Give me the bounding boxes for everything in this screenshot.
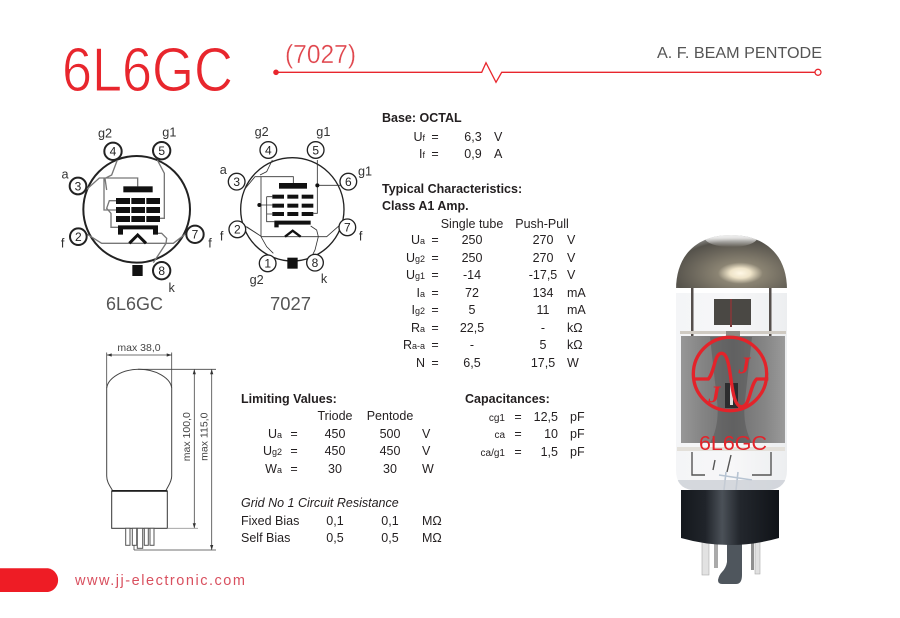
grid circuit resistance table: MΩ (422, 514, 442, 528)
grid circuit resistance table: Grid No 1 Circuit Resistance (241, 496, 399, 510)
typical characteristics table: Typical Characteristics: (382, 182, 522, 196)
grid circuit resistance table: 0,5 (326, 531, 344, 545)
tube category label: A. F. BEAM PENTODE (657, 45, 822, 62)
red JJ logo: J (707, 382, 721, 408)
typical characteristics table: 134 (533, 286, 553, 300)
header waveform line (273, 63, 821, 82)
limiting values table: Ua (268, 427, 282, 441)
limiting values table: 450 (325, 427, 345, 441)
limiting values table: Pentode (367, 409, 413, 423)
typical characteristics table: W (567, 356, 579, 370)
pinout diagram: 6L6GC: 3 (75, 179, 82, 193)
limiting values table: V (422, 444, 431, 458)
pinout diagram: 7027: 1 (264, 257, 271, 271)
typical characteristics table: - (470, 338, 474, 352)
pinout diagram: 6L6GC: f (208, 236, 212, 250)
typical characteristics table: = (431, 286, 439, 300)
capacitances table (465, 392, 585, 459)
typical characteristics table: -14 (463, 268, 481, 282)
typical characteristics table: 5 (469, 303, 476, 317)
base and heater values: = (431, 130, 439, 144)
typical characteristics table: 250 (462, 251, 482, 265)
typical characteristics table: 17,5 (531, 356, 555, 370)
footer red tab (0, 568, 58, 592)
pinout diagram: 7027 (220, 125, 372, 287)
grid circuit resistance table: 0,1 (326, 514, 344, 528)
capacitances table: = (514, 445, 522, 459)
typical characteristics table: 72 (465, 286, 479, 300)
base and heater values: If (419, 147, 425, 161)
limiting values table: Limiting Values: (241, 392, 337, 406)
limiting values table: = (290, 427, 298, 441)
tube pins (702, 540, 760, 584)
pinout diagram: 6L6GC: g2 (98, 126, 112, 140)
red JJ logo: J (737, 353, 751, 379)
capacitances table: 10 (544, 427, 558, 441)
typical characteristics table: 11 (537, 303, 550, 317)
red type marking on glass: 6L6GC (699, 433, 767, 455)
capacitances table: pF (570, 410, 585, 424)
typical characteristics table: Ia (416, 286, 425, 300)
limiting values table: = (290, 462, 298, 476)
capacitances table: cg1 (489, 413, 505, 424)
typical characteristics table: mA (567, 303, 586, 317)
pinout diagram: 7027: 5 (312, 143, 319, 157)
typical characteristics table: -17,5 (529, 268, 557, 282)
pinout diagram: 7027: 3 (233, 175, 240, 189)
glass bulb (676, 235, 787, 490)
capacitances table: ca (494, 430, 505, 441)
capacitances table: pF (570, 427, 585, 441)
pinout diagram: 7027: g1 (358, 165, 372, 179)
base and heater values: A (494, 147, 503, 161)
pinout diagram: 6L6GC: k (169, 281, 176, 295)
base and heater values (382, 111, 503, 161)
pinout diagram: 6L6GC (61, 126, 212, 295)
typical characteristics table: 270 (533, 251, 553, 265)
typical characteristics table: = (431, 303, 439, 317)
typical characteristics table: V (567, 268, 576, 282)
dimension drawing: max 38,0 (117, 342, 161, 354)
base and heater values: 6,3 (464, 130, 482, 144)
limiting values table: V (422, 427, 431, 441)
base and heater values: 0,9 (464, 147, 482, 161)
typical characteristics table: 22,5 (460, 321, 484, 335)
typical characteristics table: 5 (540, 338, 547, 352)
limiting values table: 450 (380, 444, 400, 458)
website url: www.jj-electronic.com (74, 573, 245, 589)
title: 6L6GC (62, 36, 233, 105)
vacuum tube photo illustration (676, 235, 787, 584)
typical characteristics table: 6,5 (463, 356, 481, 370)
typical characteristics table: Class A1 Amp. (382, 199, 469, 213)
pinout diagram: 7027: f (359, 230, 363, 244)
capacitances table: = (514, 427, 522, 441)
capacitances table: 1,5 (541, 445, 558, 459)
typical characteristics table: mA (567, 286, 586, 300)
capacitances table: ca/g1 (481, 448, 505, 459)
limiting values table: Wa (265, 462, 282, 476)
pinout diagram: 7027: 8 (312, 256, 319, 270)
limiting values table: 450 (325, 444, 345, 458)
red JJ logo (693, 337, 768, 411)
typical characteristics table: 250 (462, 233, 482, 247)
base and heater values: Uf (413, 130, 425, 144)
black base (681, 490, 779, 545)
pinout diagram: 7027: a (220, 163, 228, 177)
typical characteristics table: Ra-a (403, 338, 425, 352)
typical characteristics table: V (567, 251, 576, 265)
subtitle: alternate type: (7027) (285, 39, 356, 69)
pinout diagram: 7027: 2 (234, 223, 241, 237)
base and heater values: Base: OCTAL (382, 111, 462, 125)
typical characteristics table (382, 182, 586, 370)
capacitances table: 12,5 (534, 410, 558, 424)
typical characteristics table: Push-Pull (515, 217, 569, 231)
pinout diagram: 6L6GC: 2 (75, 230, 82, 244)
typical characteristics table: kΩ (567, 338, 583, 352)
diagram caption: 7027: 7027 (270, 293, 311, 314)
base and heater values: V (494, 130, 503, 144)
capacitances table: pF (570, 445, 585, 459)
typical characteristics table: Single tube (441, 217, 503, 231)
limiting values table: W (422, 462, 434, 476)
typical characteristics table: Ra (411, 321, 425, 335)
pinout diagram: 6L6GC: g1 (162, 126, 176, 140)
pinout diagram: 6L6GC: 4 (110, 145, 117, 159)
grid circuit resistance table: 0,1 (381, 514, 399, 528)
typical characteristics table: Ig2 (412, 303, 425, 317)
pinout diagram: 6L6GC: 8 (158, 264, 165, 278)
typical characteristics table: kΩ (567, 321, 583, 335)
dimension drawing: max 115,0 (199, 412, 211, 461)
typical characteristics table: = (431, 268, 439, 282)
pinout diagram: 6L6GC: a (61, 167, 69, 181)
typical characteristics table: N (416, 356, 425, 370)
pinout diagram: 7027: 4 (265, 143, 272, 157)
typical characteristics table: = (431, 233, 439, 247)
pinout diagram: 7027: g2 (255, 125, 269, 139)
diagram caption: 6L6GC: 6L6GC (106, 293, 163, 314)
grid circuit resistance table: MΩ (422, 531, 442, 545)
typical characteristics table: 270 (533, 233, 553, 247)
typical characteristics table: = (431, 356, 439, 370)
pinout diagram: 6L6GC: 5 (158, 144, 165, 158)
limiting values table: 500 (380, 427, 400, 441)
pinout diagram: 7027: g1 (316, 125, 330, 139)
base and heater values: = (431, 147, 439, 161)
typical characteristics table: = (431, 251, 439, 265)
typical characteristics table: = (431, 321, 439, 335)
grid circuit resistance table: Self Bias (241, 531, 290, 545)
typical characteristics table: V (567, 233, 576, 247)
limiting values table: = (290, 444, 298, 458)
limiting values table: 30 (328, 462, 342, 476)
limiting values table: Triode (318, 409, 353, 423)
pinout diagram: 6L6GC: f (61, 236, 65, 250)
typical characteristics table: Ug1 (406, 268, 425, 282)
pinout diagram: 6L6GC: 7 (192, 228, 199, 242)
pinout diagram: 7027: k (321, 272, 328, 286)
typical characteristics table: Ug2 (406, 251, 425, 265)
typical characteristics table: = (431, 338, 439, 352)
capacitances table: Capacitances: (465, 392, 550, 406)
typical characteristics table: Ua (411, 233, 425, 247)
capacitances table: = (514, 410, 522, 424)
dimension drawing: max 100,0 (181, 412, 193, 461)
limiting values table (241, 392, 434, 476)
limiting values table: 30 (383, 462, 397, 476)
limiting values table: Ug2 (263, 444, 282, 458)
grid circuit resistance table (241, 496, 442, 545)
grid circuit resistance table: 0,5 (381, 531, 399, 545)
dimension drawing (107, 342, 216, 550)
pinout diagram: 7027: f (220, 230, 224, 244)
typical characteristics table: - (541, 321, 545, 335)
pinout diagram: 7027: 6 (345, 175, 352, 189)
grid circuit resistance table: Fixed Bias (241, 514, 299, 528)
pinout diagram: 7027: 7 (344, 221, 351, 235)
pinout diagram: 7027: g2 (250, 273, 264, 287)
